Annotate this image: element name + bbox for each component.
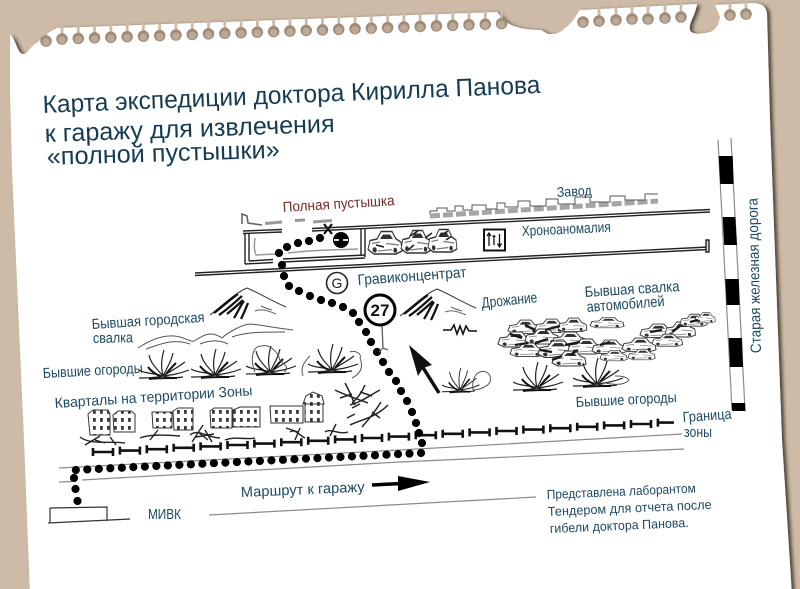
note text: гибели доктора Панова. [549, 515, 689, 536]
binding holes along the top [46, 3, 746, 42]
label: former city dump [91, 310, 205, 347]
label: tremor: Дрожание [481, 289, 538, 312]
sign: target marker with x [324, 224, 349, 248]
label: zone border [682, 407, 733, 441]
factory skyline [242, 194, 658, 225]
railway: old railroad [718, 138, 746, 411]
label: old railroad: Старая железная дорога [744, 197, 765, 353]
label: MIVK: МИВК [148, 506, 181, 523]
label: gravity concentrate: Гравиконцентрат [357, 264, 467, 289]
title: «полной пустышки» [46, 136, 280, 171]
gardens, right [442, 358, 629, 393]
road lines [59, 434, 684, 515]
car dump illustration [498, 312, 715, 366]
label: quarters in the Zone: Кварталы на территории Зоны [54, 383, 253, 412]
gardens and shrubs, left [139, 344, 388, 427]
hills outline [138, 324, 293, 349]
bushes along the border [80, 424, 348, 445]
mountain, left [210, 288, 286, 319]
title: Карта экспедиции доктора Кирилла Панова [42, 71, 541, 119]
note text: Тендером для отчета после [547, 497, 712, 519]
label: former car dump: Бывшая свалка [584, 278, 681, 301]
label: former city dump: Бывшая городская [91, 310, 205, 333]
label: former city dump: свалка [93, 330, 134, 347]
zone border [93, 419, 674, 456]
label: former car dump: автомобилей [586, 293, 665, 316]
sign: number 27: 27 [371, 301, 389, 320]
note text: Представлена лаборантом [546, 481, 696, 502]
label: former gardens, right: Бывшие огороды [575, 390, 677, 411]
title [42, 71, 541, 171]
label: full dummy: Полная пустышка [282, 193, 396, 216]
label: factory: Завод [556, 182, 592, 200]
label: former gardens, left: Бывшие огороды [42, 361, 143, 382]
big direction arrow [409, 345, 439, 393]
icon: gravity sign G: G [332, 275, 342, 291]
label: former car dump [584, 278, 681, 316]
title: к гаражу для извлечения [44, 110, 335, 148]
mountain, right [400, 289, 476, 320]
label: zone border: зоны [684, 425, 712, 441]
icon: gravity sign G [326, 272, 348, 294]
sign: number 27 [365, 295, 395, 352]
compound walls and roads [195, 210, 710, 276]
label: chronoanomaly: Хроноаномалия [521, 220, 611, 240]
label: route to the garage: Маршрут к гаражу [240, 480, 366, 501]
route arrow [372, 476, 430, 491]
note text [546, 481, 712, 536]
icon: chronoanomaly box [484, 230, 505, 250]
icon: tremor zigzag [443, 325, 477, 334]
buildings [88, 392, 324, 435]
cars in the compound [368, 230, 457, 254]
label: zone border: Граница [682, 407, 733, 426]
route: dotted path to the garage [74, 238, 422, 501]
MIVK box [48, 507, 130, 523]
